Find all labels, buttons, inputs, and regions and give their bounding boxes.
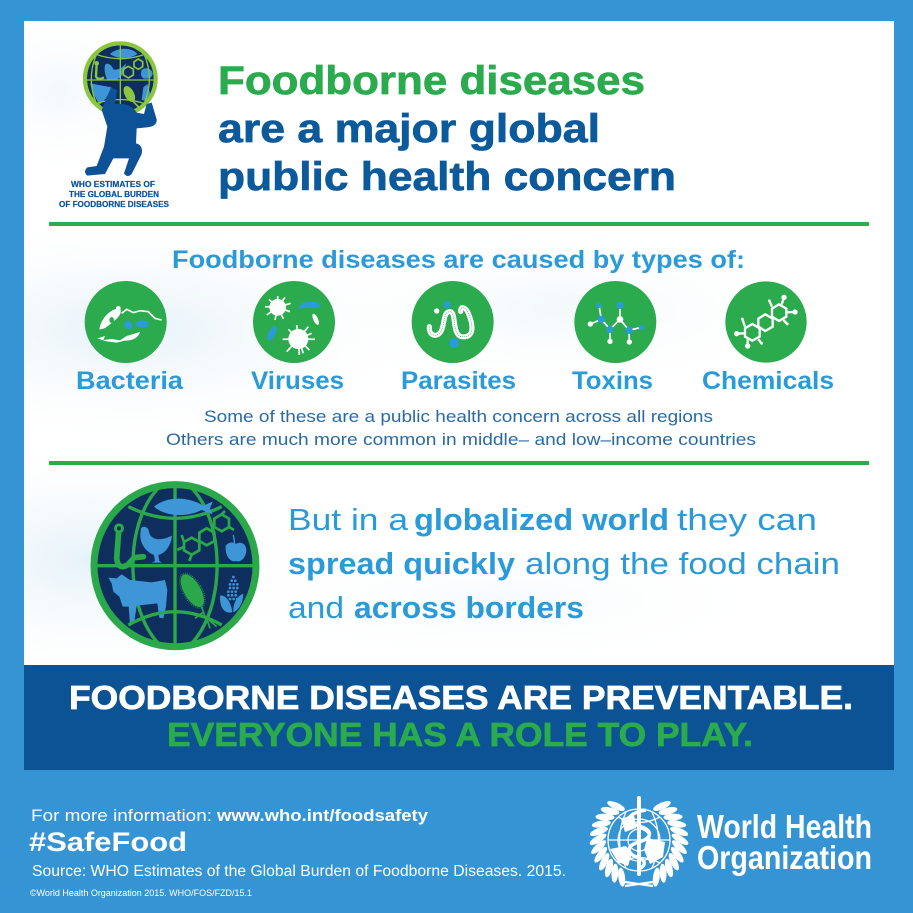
- footer: information and source: Source: WHO Estimates of the Global Burden of Foodborne Diseases. 2015.: [32, 863, 566, 880]
- logo text: World Health Organization: Organization: [697, 839, 872, 876]
- logo: WHO estimates figure holding globe: THE GLOBAL BURDEN: [69, 190, 159, 199]
- banner: preventable: FOODBORNE DISEASES ARE PREVENTABLE.: [69, 679, 853, 716]
- heading: causes: Foodborne diseases are caused by types of:: [172, 246, 745, 274]
- footer: information and source: ©World Health Organization 2015. WHO/FOS/FZD/15.1: [30, 888, 252, 898]
- icon: chemicals: [725, 281, 807, 363]
- logo: WHO estimates figure holding globe: OF FOODBORNE DISEASES: [59, 200, 170, 209]
- banner: preventable: [24, 665, 894, 770]
- footer: information and source: www.who.int/foodsafety: [216, 806, 429, 825]
- text block: globalized world: globalized world: [414, 502, 669, 537]
- footer: information and source: [29, 806, 566, 898]
- text block: globalized world: spread quickly: [288, 546, 516, 581]
- icon: parasites: [412, 281, 494, 363]
- text block: regions note: Others are much more common in middle– and low–income countries: [166, 430, 756, 449]
- text block: globalized world: along the food chain: [525, 546, 840, 581]
- panel: main white card: [0, 0, 894, 690]
- title: are a major global: [218, 107, 600, 151]
- icon: bacteria: [85, 281, 167, 363]
- logo: WHO estimates figure holding globe: WHO ESTIMATES OF: [71, 180, 155, 189]
- label: Chemicals: Chemicals: [702, 367, 834, 395]
- label: Viruses: Viruses: [251, 367, 344, 395]
- label: Bacteria: Bacteria: [76, 367, 184, 395]
- footer: information and source: For more information:: [31, 806, 212, 825]
- text block: globalized world: they can: [677, 502, 817, 537]
- text block: globalized world: But in a: [288, 502, 409, 537]
- food icons: [108, 499, 246, 625]
- text block: regions note: [166, 407, 756, 449]
- text block: regions note: Some of these are a public health concern across all regions: [204, 407, 713, 426]
- icon: food chain globe: [90, 482, 260, 650]
- title: [218, 59, 676, 199]
- label: Toxins: Toxins: [572, 367, 653, 395]
- icon: toxins: [574, 281, 656, 363]
- label: Parasites: Parasites: [401, 367, 516, 395]
- text block: globalized world: and: [288, 590, 344, 625]
- footer: information and source: #SafeFood: [29, 827, 187, 857]
- icon: viruses: [253, 281, 335, 363]
- title: Foodborne diseases: [218, 59, 645, 103]
- logo: WHO emblem: [588, 798, 690, 887]
- logo: WHO estimates figure holding globe: [59, 43, 170, 209]
- title: public health concern: [218, 155, 676, 199]
- logo text: World Health Organization: World Health: [697, 808, 872, 845]
- banner: preventable: EVERYONE HAS A ROLE TO PLAY.: [167, 716, 753, 753]
- text block: globalized world: across borders: [354, 590, 584, 625]
- text block: globalized world: [288, 502, 840, 625]
- logo text: World Health Organization: [697, 808, 872, 876]
